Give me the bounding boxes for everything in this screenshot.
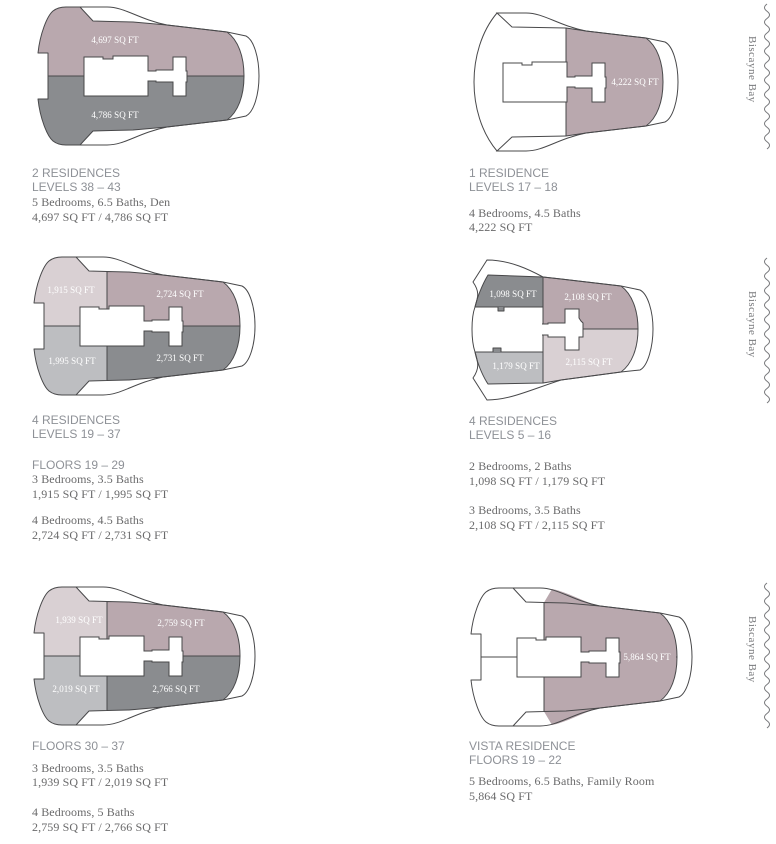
bay edge: top [746,4,770,149]
text block: floors 30-37: 2,759 SQ FT / 2,766 SQ FT [32,820,169,834]
floor plan: floors 30-37 [34,587,255,725]
text block: levels 17-18: LEVELS 17 – 18 [469,180,558,194]
text block: levels 5-16: 2,108 SQ FT / 2,115 SQ FT [469,518,605,532]
text block: levels 38-43: 5 Bedrooms, 6.5 Baths, Den [32,195,170,209]
text block: levels 5-16: 3 Bedrooms, 3.5 Baths [469,503,581,517]
floor plan: levels 38-43: 4,697 SQ FT [91,35,139,45]
text block: levels 5-16: 1,098 SQ FT / 1,179 SQ FT [469,474,606,488]
text block: levels 17-18: 1 RESIDENCE [469,166,549,180]
floor plan: levels 19-37: 1,995 SQ FT [48,356,96,366]
floor plan: levels 5-16: 2,115 SQ FT [566,357,613,367]
floor plan: levels 19-37: 2,731 SQ FT [156,353,204,363]
text block: levels 19-37 [32,413,169,542]
floor plan: levels 5-16: 1,098 SQ FT [489,289,537,299]
text block: floors 30-37 [32,739,169,834]
text block: vista residence: VISTA RESIDENCE [469,739,575,753]
text block: levels 5-16: 4 RESIDENCES [469,414,557,428]
bay edge: bottom: Biscayne Bay [746,616,758,683]
floor plan: levels 5-16: 1,179 SQ FT [492,361,540,371]
floor plan: levels 38-43 [38,7,259,145]
floor plan: levels 19-37: 1,915 SQ FT [47,285,95,295]
floor plan: levels 17-18 [474,13,678,151]
text block: floors 30-37: 1,939 SQ FT / 2,019 SQ FT [32,775,169,789]
bay edge: middle [746,258,770,403]
floor plan: floors 30-37: 2,766 SQ FT [152,684,200,694]
floor plan: levels 38-43: 4,786 SQ FT [91,110,139,120]
floor plan: vista residence: 5,864 SQ FT [623,652,671,662]
text block: vista residence: 5,864 SQ FT [469,789,533,803]
text block: vista residence: 5 Bedrooms, 6.5 Baths, Family Room [469,774,655,788]
bay edge: bottom [746,583,770,728]
text block: vista residence: FLOORS 19 – 22 [469,753,562,767]
bay edge: middle: Biscayne Bay [746,291,758,358]
text block: levels 19-37: LEVELS 19 – 37 [32,427,121,441]
text block: levels 19-37: FLOORS 19 – 29 [32,458,125,472]
bay edge: top: Biscayne Bay [746,36,758,103]
text block: levels 19-37: 3 Bedrooms, 3.5 Baths [32,472,144,486]
text block: levels 17-18: 4 Bedrooms, 4.5 Baths [469,206,581,220]
text block: levels 38-43: 4,697 SQ FT / 4,786 SQ FT [32,210,169,224]
floor plan: floors 30-37: 1,939 SQ FT [55,615,103,625]
floor plan: levels 19-37: 2,724 SQ FT [156,289,204,299]
text block: floors 30-37: 3 Bedrooms, 3.5 Baths [32,761,144,775]
floor plan: floors 30-37: 2,019 SQ FT [52,684,100,694]
text block: levels 38-43 [32,166,170,224]
text block: levels 19-37: 2,724 SQ FT / 2,731 SQ FT [32,528,169,542]
floor plan: levels 5-16 [472,260,653,400]
text block: vista residence [469,739,655,803]
open living area [476,308,543,351]
text block: levels 5-16: 2 Bedrooms, 2 Baths [469,459,572,473]
floor plan: floors 30-37: 2,759 SQ FT [157,618,205,628]
text block: levels 19-37: 4 Bedrooms, 4.5 Baths [32,513,144,527]
text block: levels 19-37: 1,915 SQ FT / 1,995 SQ FT [32,487,169,501]
text block: levels 5-16 [469,414,606,532]
text block: levels 5-16: LEVELS 5 – 16 [469,428,551,442]
text block: levels 17-18: 4,222 SQ FT [469,220,533,234]
floor plan: levels 19-37 [34,257,255,395]
service core [542,309,583,350]
text block: floors 30-37: 4 Bedrooms, 5 Baths [32,805,135,819]
text block: levels 19-37: 4 RESIDENCES [32,413,120,427]
floor plan: levels 17-18: 4,222 SQ FT [611,77,659,87]
floor plan: vista residence [471,588,692,726]
floor plan: levels 5-16: 2,108 SQ FT [564,292,612,302]
text block: levels 38-43: 2 RESIDENCES [32,166,120,180]
text block: levels 17-18 [469,166,581,234]
text block: floors 30-37: FLOORS 30 – 37 [32,739,125,753]
text block: levels 38-43: LEVELS 38 – 43 [32,180,121,194]
